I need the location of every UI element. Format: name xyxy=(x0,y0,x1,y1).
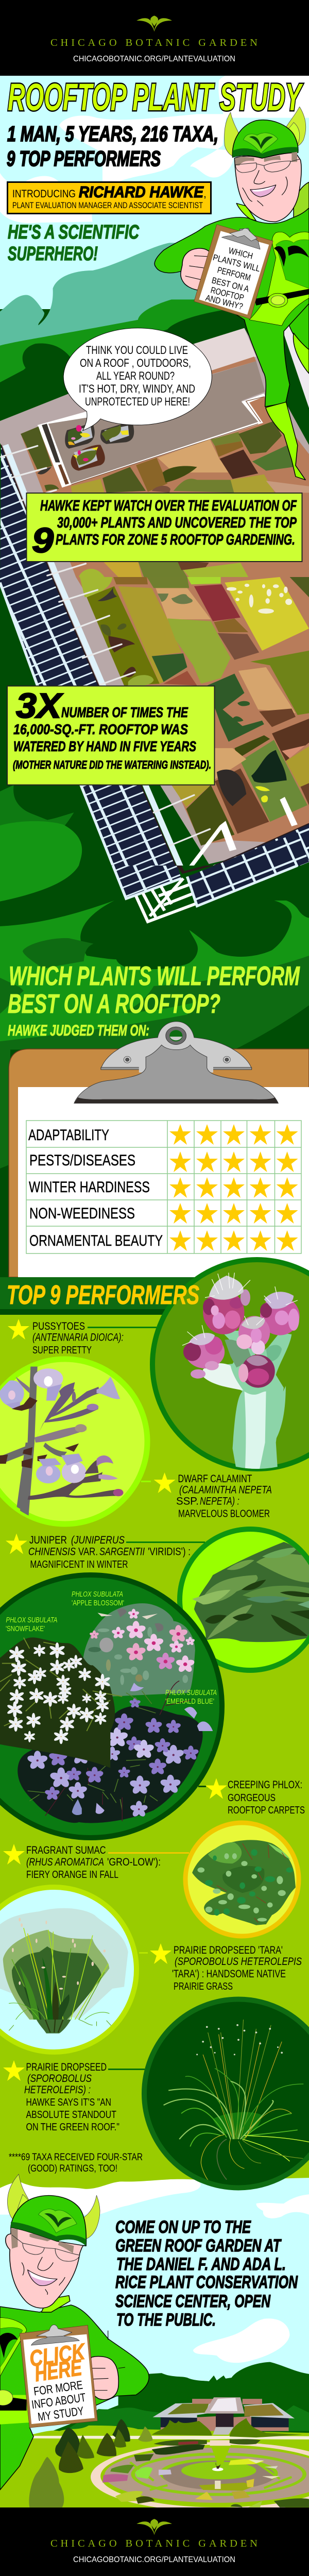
speech bubble xyxy=(63,328,212,431)
plots lower xyxy=(80,577,309,845)
speech bubble: THINK YOU COULD LIVE xyxy=(86,344,188,357)
emerald blue patch xyxy=(18,1706,203,1823)
performer: dwarf calamint: NEPETA) : xyxy=(200,1496,239,1507)
landscape scene xyxy=(0,2318,309,2512)
bottom sky xyxy=(0,2178,309,2535)
mouth xyxy=(28,2270,57,2286)
intro box: RICHARD HAWKE xyxy=(79,183,204,201)
wall band xyxy=(194,328,256,370)
callout: 3x watering: WATERED BY HAND IN FIVE YEARS xyxy=(13,738,196,754)
intro box: INTRODUCING xyxy=(12,188,76,200)
come on up text: COME ON UP TO THE xyxy=(115,2217,251,2237)
cloud xyxy=(193,2318,289,2363)
performer: pussytoes xyxy=(8,1319,157,1356)
far trees band xyxy=(59,2408,197,2435)
performer: juniper: JUNIPER xyxy=(29,1534,67,1546)
grass circle 2 xyxy=(144,1999,309,2188)
performer: prairie dropseed: PRAIRIE DROPSEED xyxy=(26,2061,107,2073)
performer: prairie dropseed xyxy=(3,2060,145,2133)
hair xyxy=(11,2228,74,2253)
rating table: NON-WEEDINESS xyxy=(29,1205,135,1222)
deck dark stripes xyxy=(42,397,264,485)
pussytoes circle xyxy=(150,1257,309,1471)
white frame posts xyxy=(189,797,298,866)
left wing xyxy=(225,112,238,157)
performer: dwarf calamint: SSP. xyxy=(176,1496,199,1507)
chest panel xyxy=(0,2318,27,2377)
footnote xyxy=(9,2152,143,2174)
performer: dwarf calamint xyxy=(141,1472,272,1520)
left wing xyxy=(7,2174,30,2223)
superhero tagline: HE'S A SCIENTIFIC xyxy=(8,222,139,243)
hills xyxy=(33,2362,309,2438)
question heading xyxy=(8,961,300,1039)
performer: juniper: (JUNIPERUS xyxy=(71,1534,125,1546)
performer: pussytoes: PUSSYTOES xyxy=(32,1320,85,1332)
torso and arm xyxy=(154,208,309,406)
foreground foliage xyxy=(0,785,82,866)
belt xyxy=(254,289,309,306)
planters xyxy=(65,421,134,471)
rating table: ORNAMENTAL BEAUTY xyxy=(29,1232,163,1249)
hand xyxy=(86,2357,118,2400)
come on up text: TO THE PUBLIC. xyxy=(116,2310,216,2330)
callout: hawke kept watch xyxy=(27,493,302,562)
planted plots upper xyxy=(21,421,309,577)
url: CHICAGOBOTANIC.ORG/PLANTEVALUATION xyxy=(73,55,235,63)
field ground xyxy=(21,396,309,844)
performer: prairie dropseed: (SPOROBOLUS xyxy=(27,2073,92,2084)
logo header xyxy=(136,15,172,31)
performer: creeping phlox: GORGEOUS xyxy=(228,1792,276,1804)
performer: dwarf calamint: MARVELOUS BLOOMER xyxy=(178,1509,270,1520)
performer: fragrant sumac: (RHUS AROMATICA xyxy=(26,1856,104,1868)
garden name footer: CHICAGO BOTANIC GARDEN xyxy=(50,2538,258,2549)
superhero tagline xyxy=(8,222,139,265)
glasses xyxy=(12,2235,80,2261)
top black header xyxy=(0,0,309,76)
circular garden xyxy=(91,2439,309,2512)
right boot xyxy=(294,333,309,374)
click here text: HERE xyxy=(33,2355,84,2386)
chest emblem xyxy=(276,240,309,289)
clipboard clip xyxy=(221,228,260,249)
belt xyxy=(0,2396,27,2411)
heading: top 9 performers: TOP 9 PERFORMERS xyxy=(7,1280,199,1310)
performer: pussytoes: SUPER PRETTY xyxy=(32,1345,92,1356)
rating stars xyxy=(169,1124,298,1251)
hair xyxy=(235,152,297,165)
clipboard xyxy=(20,2325,97,2428)
performer: fragrant sumac: FRAGRANT SUMAC xyxy=(26,1844,106,1856)
clipboard panel xyxy=(9,1022,309,1277)
foliage base xyxy=(0,309,309,1082)
snowflake patch xyxy=(0,1637,122,1768)
performers heading band xyxy=(0,1277,309,1315)
foliage lower band xyxy=(0,866,309,1049)
callout: 3x watering: 16,000-SQ.-FT. ROOFTOP WAS xyxy=(13,721,188,737)
hero clipboard question: BEST ON A xyxy=(211,275,250,294)
performer: prairie dropseed: ABSOLUTE STANDOUT xyxy=(26,2109,116,2121)
performer: fragrant sumac: FIERY ORANGE IN FALL xyxy=(26,1869,118,1880)
nose and smile xyxy=(22,2257,65,2295)
sky background xyxy=(0,0,309,515)
lawn xyxy=(0,2426,309,2509)
arm crease xyxy=(108,2331,125,2368)
glasses xyxy=(235,159,300,173)
performer: fragrant sumac xyxy=(3,1844,189,1880)
left solar array xyxy=(0,445,181,899)
click here text: FOR MORE xyxy=(33,2378,83,2398)
mouth xyxy=(250,185,276,197)
face xyxy=(6,2228,85,2308)
bottom solar array xyxy=(187,824,309,906)
rating table: ADAPTABILITY xyxy=(28,1127,109,1144)
torso panel xyxy=(249,232,309,326)
question heading: HAWKE JUDGED THEM ON: xyxy=(8,1022,149,1039)
green roof scene xyxy=(0,299,309,906)
phlox labels: 'APPLE BLOSSOM' xyxy=(72,1599,124,1607)
nose and smile xyxy=(243,170,287,206)
superhero tagline: SUPERHERO! xyxy=(8,243,98,265)
callout: 3x watering: (MOTHER NATURE DID THE WATERING INSTEAD). xyxy=(13,758,211,771)
helmet xyxy=(232,120,298,158)
speech bubble: ALL YEAR ROUND? xyxy=(96,369,175,382)
performer: juniper: MAGNIFICENT IN WINTER xyxy=(30,1559,128,1570)
intro box xyxy=(7,182,211,213)
callout: 3x watering: NUMBER OF TIMES THE xyxy=(61,704,188,720)
performer: dwarf calamint: (CALAMINTHA NEPETA xyxy=(179,1484,272,1496)
right wing xyxy=(284,107,306,148)
speech bubble: IT'S HOT, DRY, WINDY, AND xyxy=(79,382,195,395)
flower heads xyxy=(203,1276,250,1334)
grass circle 1 xyxy=(0,1887,136,2052)
garden name: CHICAGO BOTANIC GARDEN xyxy=(50,37,258,48)
intro box: PLANT EVALUATION MANAGER AND ASSOCIATE SCIENTIST xyxy=(12,200,203,210)
helmet xyxy=(11,2196,86,2246)
come on up text xyxy=(115,2217,298,2330)
calamint circle xyxy=(0,1359,147,1540)
phlox labels: 'EMERALD BLUE' xyxy=(165,1697,214,1706)
question heading: BEST ON A ROOFTOP? xyxy=(8,989,220,1019)
intro box: , xyxy=(203,188,207,200)
performer: juniper: SARGENTII xyxy=(99,1546,145,1558)
hero figure top xyxy=(154,107,309,480)
phlox labels xyxy=(6,1590,217,1706)
click here text xyxy=(28,2339,88,2424)
face xyxy=(234,152,301,222)
url footer: CHICAGOBOTANIC.ORG/PLANTEVALUATION xyxy=(73,2555,235,2564)
speech bubble: ON A ROOF , OUTDOORS, xyxy=(80,357,191,369)
performer: dwarf calamint: DWARF CALAMINT xyxy=(178,1473,252,1485)
performer: fragrant sumac: 'GRO-LOW'): xyxy=(107,1856,161,1868)
clip xyxy=(31,2333,79,2345)
cream walk xyxy=(32,2436,309,2439)
deck pad xyxy=(48,361,265,484)
right leg xyxy=(286,298,309,359)
performer: juniper: CHINENSIS xyxy=(28,1546,76,1558)
footnote: (GOOD) RATINGS, TOO! xyxy=(28,2163,117,2174)
callout: hawke kept watch: 9 xyxy=(32,521,54,560)
click here text: INFO ABOUT xyxy=(31,2391,87,2411)
left edge under foliage xyxy=(0,1048,10,1277)
hero clipboard question: PERFORM xyxy=(216,265,252,283)
boot left xyxy=(266,402,305,480)
hero figure bottom xyxy=(0,2174,149,2490)
hero clipboard question xyxy=(204,246,261,312)
clouds behind title xyxy=(0,47,309,223)
lime fold over sky xyxy=(0,2167,193,2189)
light poles xyxy=(1,446,210,845)
juniper circle xyxy=(180,1529,309,1670)
hero clipboard question: WHICH xyxy=(228,246,254,261)
emblem logo xyxy=(274,246,309,267)
click here text: MY STUDY xyxy=(37,2404,84,2424)
hand xyxy=(181,248,211,290)
array edges xyxy=(0,445,309,906)
deck border xyxy=(38,394,265,487)
collar xyxy=(41,2296,70,2312)
performer: juniper: 'VIRIDIS') : xyxy=(148,1546,191,1558)
apple blossom patch xyxy=(83,1603,195,1697)
collar xyxy=(236,204,256,221)
rating table: PESTS/DISEASES xyxy=(29,1152,135,1169)
performer: prairie dropseed: ON THE GREEN ROOF." xyxy=(26,2122,119,2133)
white tufts xyxy=(182,1273,298,1345)
stems xyxy=(225,1330,291,1469)
performer: prairie dropseed: HETEROLEPIS) : xyxy=(24,2084,91,2096)
brown strip xyxy=(212,357,256,374)
distant hills xyxy=(0,243,309,442)
hero clipboard question: ROOFTOP xyxy=(210,285,245,303)
roof concrete xyxy=(0,328,309,864)
speech bubble: UNPROTECTED UP HERE! xyxy=(85,395,190,408)
phlox labels: 'SNOWFLAKE' xyxy=(6,1624,45,1633)
hero clipboard question: AND WHY? xyxy=(204,293,244,312)
clipboard clip large xyxy=(74,1022,278,1103)
phlox labels: PHLOX SUBULATA xyxy=(165,1688,217,1697)
clipboard xyxy=(194,225,273,319)
phlox labels: PHLOX SUBULATA xyxy=(6,1616,58,1624)
phlox circle xyxy=(0,1575,222,1838)
footer black xyxy=(0,2507,309,2576)
performer: prairie dropseed tara: PRAIRIE GRASS xyxy=(174,1981,233,1992)
solar repeats over foliage: bottom truss xyxy=(113,833,309,922)
footnote: ****69 TAXA RECEIVED FOUR-STAR xyxy=(9,2152,143,2163)
performer: juniper: VAR. xyxy=(78,1546,98,1558)
performer: prairie dropseed: HAWKE SAYS IT'S "AN xyxy=(26,2097,111,2108)
subtitle xyxy=(7,122,218,171)
right wing xyxy=(83,2195,100,2240)
click here text: CLICK xyxy=(28,2339,88,2371)
callout: 3x watering: 3X xyxy=(16,686,63,725)
sumac circle xyxy=(185,1823,299,1936)
performers background xyxy=(0,1277,309,2189)
subtitle: 9 TOP PERFORMERS xyxy=(7,146,161,171)
rating table: WINTER HARDINESS xyxy=(29,1179,150,1196)
rating table xyxy=(26,1121,301,1253)
wall right xyxy=(276,299,309,408)
performer: juniper xyxy=(6,1533,205,1570)
subtitle: 1 MAN, 5 YEARS, 216 TAXA, xyxy=(7,122,218,146)
performer: pussytoes: (ANTENNARIA DIOICA): xyxy=(32,1331,124,1344)
torso xyxy=(0,2305,149,2490)
performer: creeping phlox xyxy=(198,1778,305,1816)
logo footer xyxy=(136,2519,172,2535)
cape xyxy=(294,182,309,230)
hero clipboard question: PLANTS WILL xyxy=(212,252,261,274)
callout: 3x watering xyxy=(7,686,214,785)
building xyxy=(152,2397,302,2437)
phlox labels: PHLOX SUBULATA xyxy=(72,1590,123,1599)
performer: prairie dropseed tara xyxy=(139,1943,302,1992)
trees xyxy=(29,2419,153,2507)
